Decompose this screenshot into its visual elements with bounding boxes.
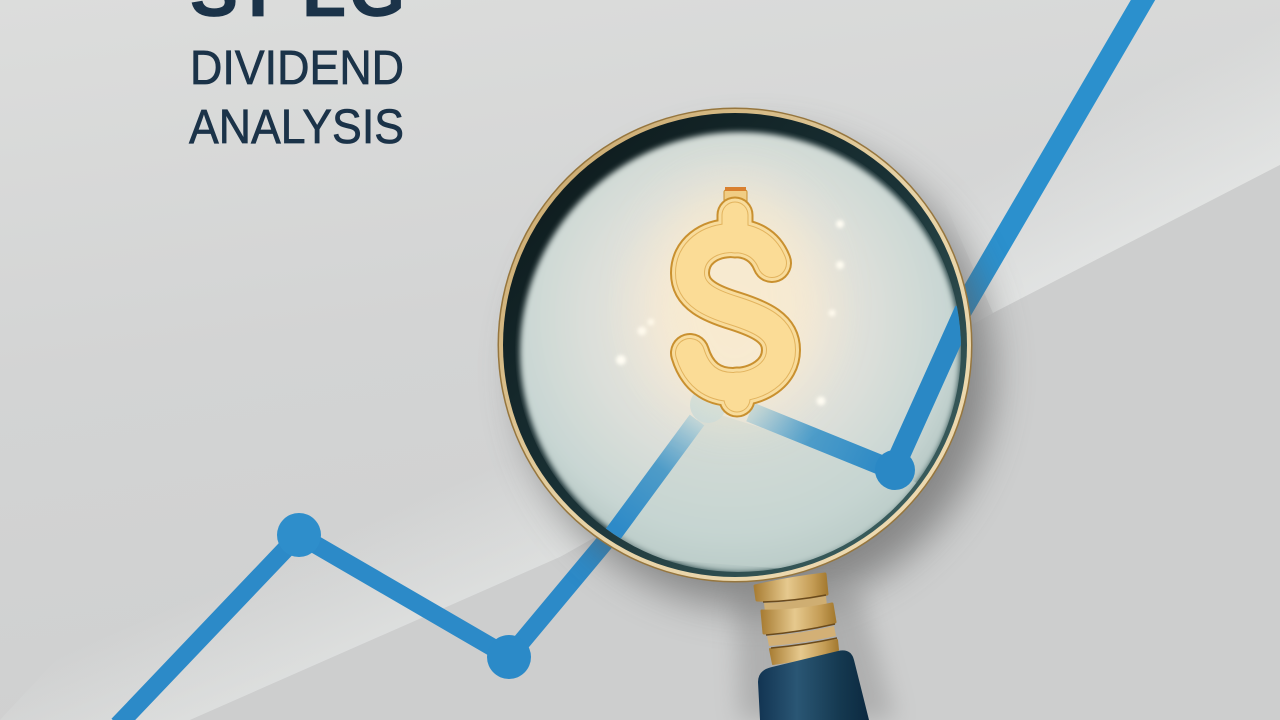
- navy grip: [758, 650, 869, 720]
- dark inner bezel: [503, 113, 967, 577]
- glass: [520, 132, 965, 572]
- chart node 1: [277, 513, 321, 557]
- sparkles: [616, 220, 844, 406]
- dollar outline: [690, 215, 781, 399]
- chart line: right segment: [955, 0, 1150, 322]
- outer rim edge: [498, 108, 972, 582]
- dollar glow: [650, 185, 820, 415]
- title: [189, 0, 405, 154]
- pale peak node: [690, 394, 724, 423]
- dollar inner line: [690, 215, 781, 399]
- dollar top cap: [725, 187, 746, 191]
- chart line: left segment: [118, 518, 625, 720]
- gold collar: [755, 574, 838, 664]
- lens shadow: [521, 136, 993, 608]
- title: dividend: DIVIDEND: [190, 42, 404, 95]
- magnified line: final rise: [893, 310, 965, 470]
- gold rim: [499, 109, 971, 581]
- dollar sign icon: [690, 187, 781, 399]
- magnifying glass handle: [735, 574, 895, 720]
- magnified line: [605, 310, 965, 545]
- handle shadow: [735, 590, 895, 720]
- lower lens tint: [611, 416, 916, 568]
- chart node 2: [487, 635, 531, 679]
- dollar face: [690, 215, 781, 399]
- dollar neck: [724, 190, 747, 208]
- magnifying glass lens: [498, 108, 972, 582]
- magnified line: rising segment: [605, 420, 697, 545]
- magnified line: falling segment: [750, 412, 893, 470]
- title: analysis: ANALYSIS: [189, 101, 404, 154]
- magnified node: [875, 450, 915, 490]
- dollar light edge: [690, 215, 781, 399]
